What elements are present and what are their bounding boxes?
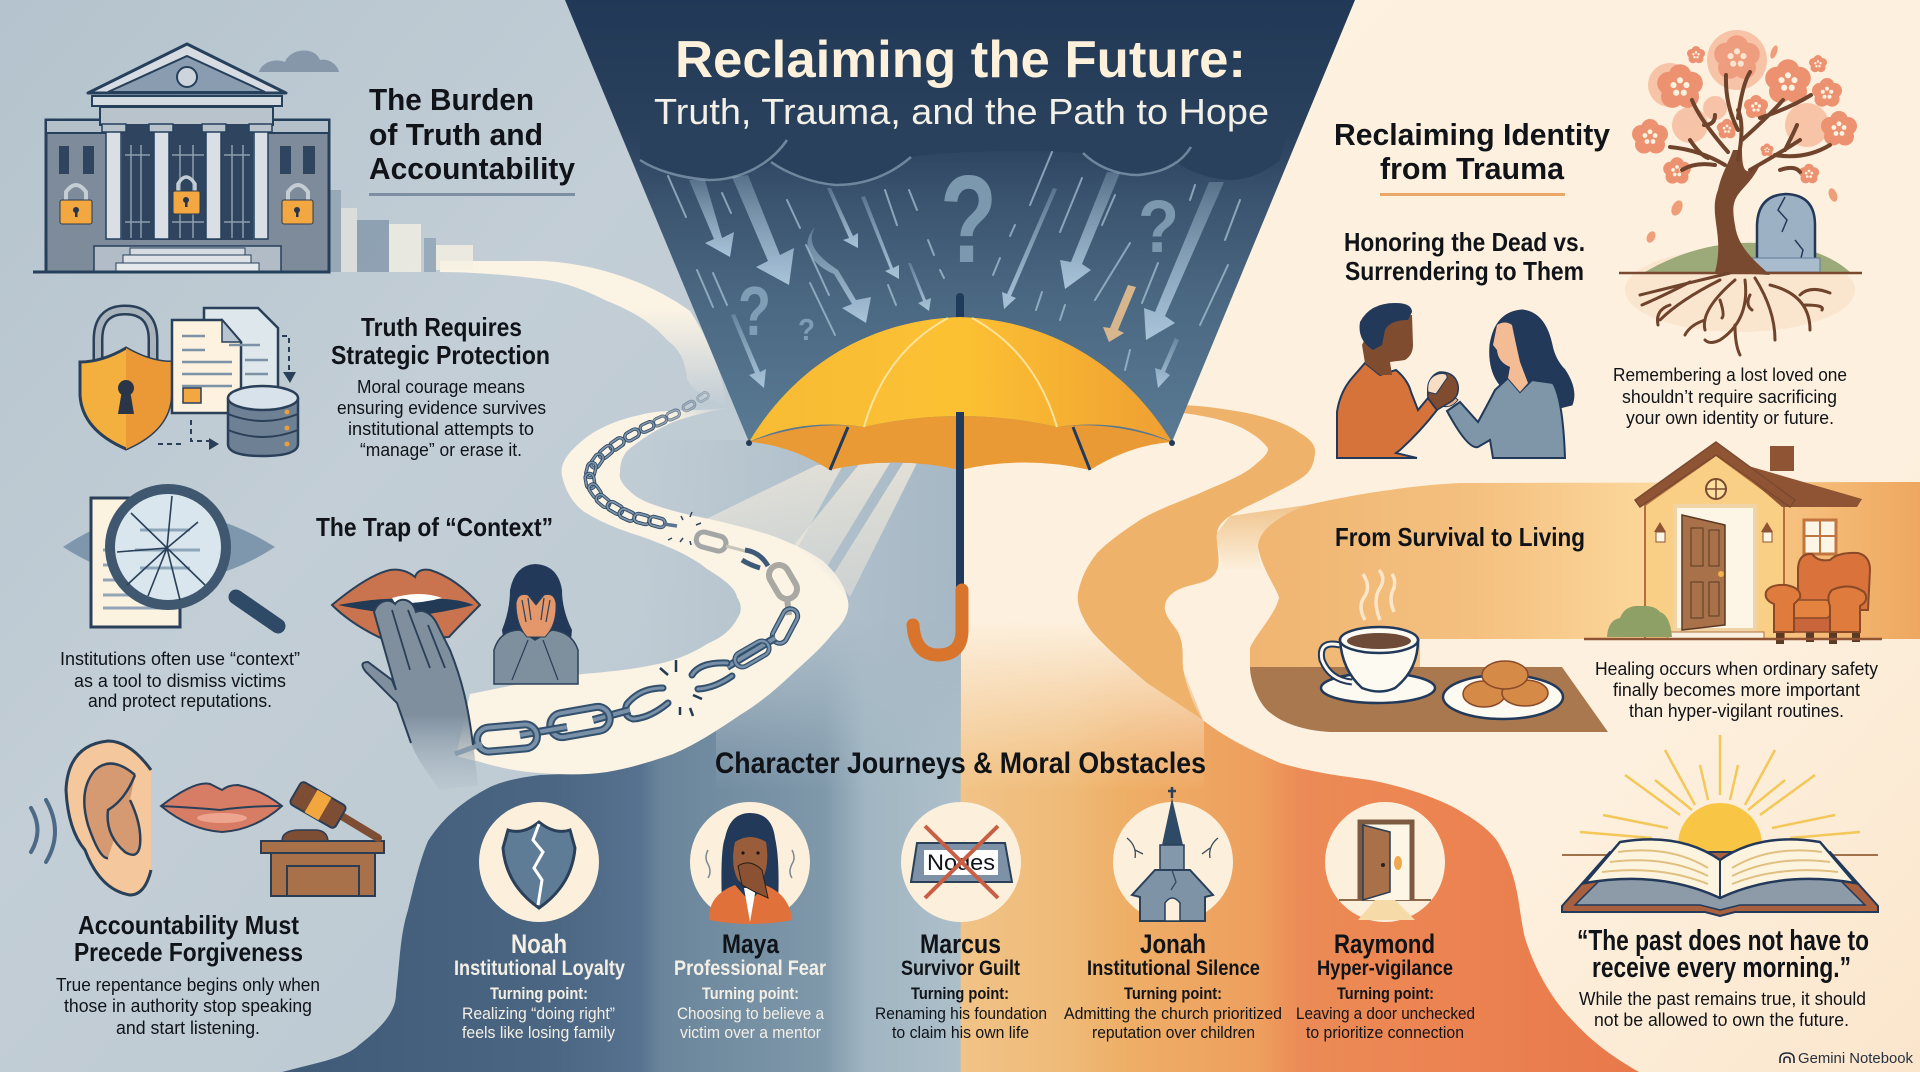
card: Jonah <box>1064 787 1282 1042</box>
icon: courthouse <box>33 44 473 272</box>
icon: open door <box>1325 802 1445 922</box>
text: context explanation: as a tool to dismiss victims <box>74 671 286 691</box>
heading: reclaiming identity: from Trauma <box>1380 151 1565 186</box>
card: Marcus <box>875 802 1047 1042</box>
card: Raymond: Hyper-vigilance <box>1317 957 1453 980</box>
icon: ruins fading <box>329 190 473 272</box>
text: accountability precedes forgiveness: Precede Forgiveness <box>74 937 303 967</box>
card: Noah: Realizing “doing right” <box>462 1004 615 1023</box>
text: truth requires protection <box>331 312 550 460</box>
heading: character journeys: Character Journeys & Moral Obstacles <box>715 747 1206 780</box>
cookies <box>1463 661 1548 707</box>
steam <box>1361 570 1395 620</box>
question marks <box>738 151 1179 350</box>
icon: house with open door <box>1607 442 1862 639</box>
cream path upper fading strip <box>440 261 727 408</box>
house ground line <box>1584 638 1882 640</box>
title: Reclaiming the Future: <box>675 31 1246 89</box>
icon: shield lock documents database <box>80 308 298 456</box>
card: Jonah: Admitting the church prioritized <box>1064 1004 1282 1023</box>
heading: survival to living: From Survival to Living <box>1335 522 1585 552</box>
card: Raymond: to prioritize connection <box>1306 1023 1464 1042</box>
sun <box>1678 803 1762 887</box>
rain arrow set <box>689 172 1224 388</box>
question marks: ? <box>798 312 815 347</box>
card: Marcus: Marcus <box>920 929 1001 959</box>
text: accountability precedes forgiveness: and start listening. <box>116 1018 260 1038</box>
icon: crossed name sign <box>901 802 1021 922</box>
tree blossoms soft <box>1648 30 1829 147</box>
storm clouds <box>640 120 1290 185</box>
card: Maya: victim over a mentor <box>680 1023 821 1042</box>
icon: small cloud <box>259 50 339 72</box>
survival band shadow sliver <box>1217 505 1307 570</box>
icon: coffee and cookies on table <box>1250 570 1608 732</box>
card: Marcus: to claim his own life <box>892 1023 1029 1042</box>
man <box>1337 303 1437 458</box>
card: Maya: Choosing to believe a <box>677 1004 824 1023</box>
text: healing occurs <box>1595 659 1878 721</box>
rain lines <box>668 152 1240 370</box>
quote and caption <box>1577 925 1869 1030</box>
tree trunk and branches <box>1715 150 1770 275</box>
table <box>1250 667 1608 732</box>
text: accountability precedes forgiveness <box>56 910 320 1038</box>
text: context explanation <box>60 649 300 711</box>
sun rays <box>1580 735 1860 838</box>
text: truth requires protection: ensuring evidence survives <box>337 398 546 418</box>
quote and caption: receive every morning.” <box>1592 952 1851 984</box>
card: Marcus: Survivor Guilt <box>901 957 1020 980</box>
saucer <box>1321 673 1435 703</box>
tree hill <box>1645 243 1850 272</box>
card: Noah <box>454 802 625 1042</box>
orange path of healing <box>1078 405 1315 720</box>
icon: open book with sunrise <box>1562 735 1878 916</box>
card: Marcus: Turning point: <box>911 984 1009 1003</box>
card: Noah: Turning point: <box>490 984 588 1003</box>
tree ground line <box>1619 272 1862 274</box>
subtitle: Truth, Trauma, and the Path to Hope <box>654 91 1269 132</box>
text: remembering lost loved one: your own identity or future. <box>1626 408 1834 428</box>
quote and caption: not be allowed to own the future. <box>1594 1010 1849 1030</box>
text: truth requires protection: Strategic Protection <box>331 340 550 370</box>
text: healing occurs: than hyper-vigilant routines. <box>1629 701 1844 721</box>
card: Maya: Turning point: <box>702 984 799 1003</box>
title <box>654 31 1269 132</box>
light rays under umbrella <box>700 463 917 597</box>
tan arrow <box>1103 285 1136 342</box>
text: remembering lost loved one: shouldn’t require sacrificing <box>1622 387 1837 407</box>
text: context explanation: and protect reputations. <box>88 691 272 711</box>
character journeys colour band <box>282 620 1639 1072</box>
cup <box>1321 644 1352 682</box>
icon: tree growing by gravestone <box>1619 30 1862 355</box>
heading: burden of truth <box>369 82 576 196</box>
card: Jonah: reputation over children <box>1092 1023 1255 1042</box>
background: left centre shade <box>640 440 961 1072</box>
icon: cracked church <box>1113 787 1233 922</box>
card: Raymond: Turning point: <box>1337 984 1434 1003</box>
tree petals <box>1645 44 1839 244</box>
text: honoring the dead <box>1344 227 1585 286</box>
question marks: ? <box>1138 185 1179 268</box>
card: Raymond: Raymond <box>1334 929 1435 959</box>
text: accountability precedes forgiveness: True repentance begins only when <box>56 975 320 995</box>
card: Jonah: Institutional Silence <box>1087 957 1260 980</box>
heading: burden of truth: of Truth and <box>369 117 543 152</box>
heading: burden of truth: The Burden <box>369 82 534 117</box>
text: honoring the dead: Surrendering to Them <box>1345 256 1584 286</box>
chain <box>455 391 801 754</box>
text: honoring the dead: Honoring the Dead vs. <box>1344 227 1585 257</box>
heading: reclaiming identity: Reclaiming Identity <box>1334 117 1611 152</box>
text: accountability precedes forgiveness: those in authority stop speaking <box>64 996 312 1016</box>
card: Marcus: Renaming his foundation <box>875 1004 1047 1023</box>
card: Raymond: Leaving a door unchecked <box>1296 1004 1475 1023</box>
card: Noah: Institutional Loyalty <box>454 957 625 980</box>
icon: fearful woman <box>690 802 810 924</box>
quote and caption: While the past remains true, it should <box>1579 989 1866 1009</box>
question marks: ? <box>738 272 771 350</box>
icon: calm lips <box>161 783 282 832</box>
card: Noah: Noah <box>511 929 567 959</box>
card: Maya <box>674 802 826 1042</box>
text: truth requires protection: institutional attempts to <box>348 419 534 439</box>
cream path of truth <box>456 408 848 774</box>
question marks: ? <box>940 151 997 289</box>
tree roots <box>1640 273 1830 355</box>
card: Jonah: Turning point: <box>1124 984 1222 1003</box>
icon: magnifier over document <box>63 489 278 627</box>
umbrella <box>746 293 1175 655</box>
card: Raymond <box>1296 802 1475 1042</box>
gravestone <box>1750 194 1820 272</box>
icon: sound waves <box>31 800 55 862</box>
icon: armchair <box>1766 553 1870 644</box>
icon: ear <box>66 741 151 895</box>
background: right half <box>961 0 1920 1072</box>
heading: trap of context: The Trap of “Context” <box>316 512 553 542</box>
text: remembering lost loved one: Remembering a lost loved one <box>1613 365 1847 385</box>
icon: locks <box>60 177 313 224</box>
tree soil shade <box>1625 248 1855 332</box>
text: accountability precedes forgiveness: Accountability Must <box>78 910 299 940</box>
icon: cracked shield <box>479 802 599 922</box>
clasped hands <box>1428 372 1458 410</box>
icon: two people clasping hands <box>1337 303 1574 458</box>
icon: gavel and podium <box>261 781 384 896</box>
heading: reclaiming identity <box>1334 117 1611 196</box>
storm funnel <box>565 0 1355 442</box>
watermark: Gemini Notebook: Gemini Notebook <box>1798 1050 1913 1067</box>
text: remembering lost loved one <box>1613 365 1847 428</box>
text: context explanation: Institutions often use “context” <box>60 649 300 669</box>
background: left half <box>0 0 961 1072</box>
text: truth requires protection: Moral courage means <box>357 377 525 397</box>
icon: woman covering face <box>494 564 578 684</box>
card: Maya: Maya <box>722 929 780 959</box>
heading: burden of truth: Accountability <box>369 151 576 186</box>
card: Noah: feels like losing family <box>462 1023 615 1042</box>
survival to living band <box>1250 482 1920 667</box>
card: Jonah: Jonah <box>1140 929 1206 959</box>
text: truth requires protection: “manage” or erase it. <box>360 440 522 460</box>
plate <box>1443 675 1563 719</box>
text: truth requires protection: Truth Requires <box>361 312 522 342</box>
icon: lips covered by hand <box>332 570 480 790</box>
icon: crossed name sign: Nodes <box>927 850 995 875</box>
woman <box>1440 310 1574 458</box>
card: Maya: Professional Fear <box>674 957 826 980</box>
text: healing occurs: Healing occurs when ordinary safety <box>1595 659 1878 679</box>
text: healing occurs: finally becomes more important <box>1613 680 1860 700</box>
